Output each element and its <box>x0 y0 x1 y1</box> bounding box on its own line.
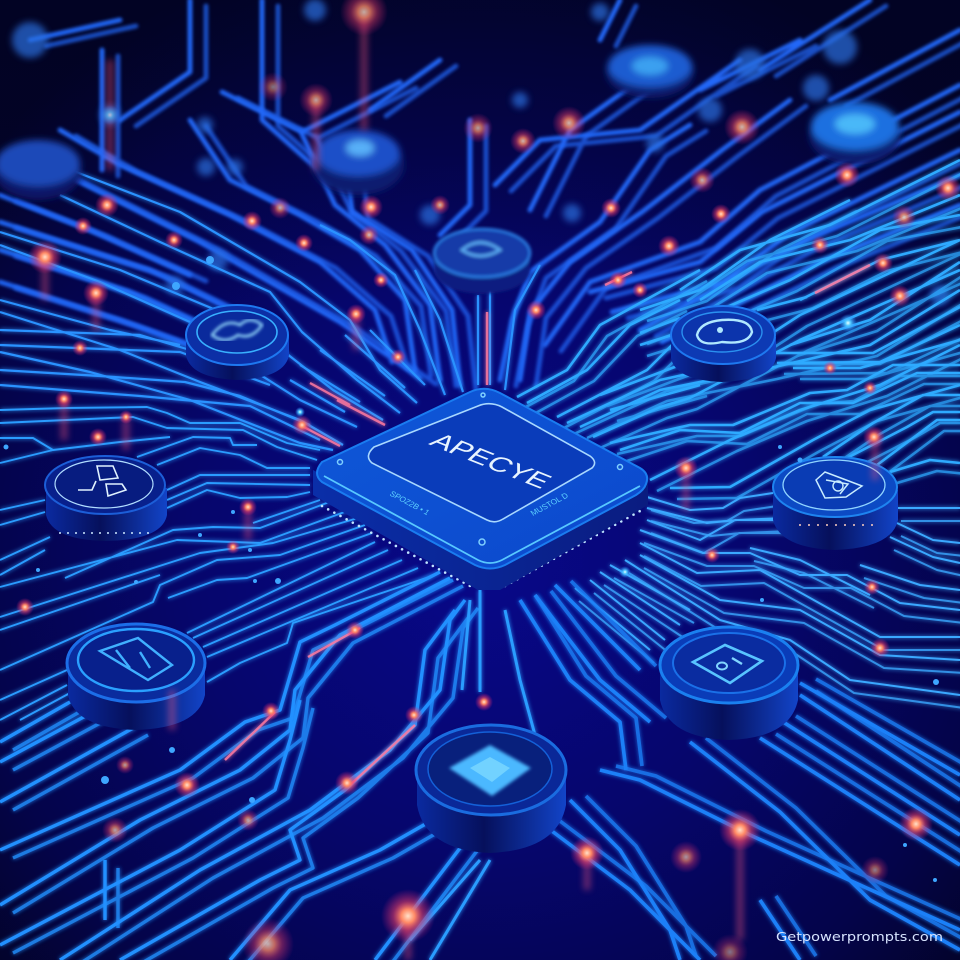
node: glowing square bottom centre <box>416 725 566 853</box>
node: blurred top far right centre <box>606 45 694 98</box>
node: blurred top centre <box>434 229 530 294</box>
node: chip icon lower right <box>660 627 798 740</box>
watermark: Getpowerprompts.com <box>776 929 943 944</box>
node: blurred top right <box>809 102 901 165</box>
chip plate edge highlight <box>324 476 640 563</box>
circuit traces: lower left parallel copy <box>13 580 483 960</box>
chip corner holes <box>338 393 622 545</box>
circuit traces: upper right fan <box>517 160 960 488</box>
processor chip <box>313 389 648 590</box>
node: swirl icon upper left <box>186 305 289 380</box>
node: face icon upper right <box>671 306 776 382</box>
node: circuit icon lower left <box>67 624 205 730</box>
blurred traces: parallel copies <box>16 6 960 391</box>
chip small label left: SPOZ2B • 1 <box>388 489 432 517</box>
node: map icon left <box>45 456 167 541</box>
blurred traces: distant top of the board <box>0 0 960 385</box>
circuit traces: thick lower left and lower centre <box>0 572 470 960</box>
pink signal traces <box>225 265 870 785</box>
node: blurred far left <box>0 140 82 200</box>
circuit traces: right parallel copy <box>579 506 960 708</box>
circuit traces: upper right parallel copy <box>524 171 960 499</box>
blurred light bokeh: top of the board <box>12 0 950 305</box>
small board solder dots <box>4 256 939 882</box>
circuit traces: bottom centre verticals <box>410 590 535 960</box>
circuit traces: thick lower right <box>520 585 960 960</box>
circuit traces: left fan <box>0 407 432 720</box>
chip label: APECYE <box>424 429 557 493</box>
chip pins <box>322 506 640 586</box>
dark veil over the top of the board <box>0 0 960 300</box>
chip side walls <box>313 470 648 590</box>
chip top plate <box>317 389 647 568</box>
node: blurred top left <box>312 130 404 195</box>
chip inner panel <box>368 404 595 522</box>
circuit traces: upper left fan <box>0 162 540 450</box>
chip small label right: MUSTOL D <box>529 491 570 518</box>
circuit traces: right and lower right fan <box>575 493 960 695</box>
circuit traces: lower right parallel copy <box>536 581 960 956</box>
node: camera icon right <box>773 457 898 550</box>
